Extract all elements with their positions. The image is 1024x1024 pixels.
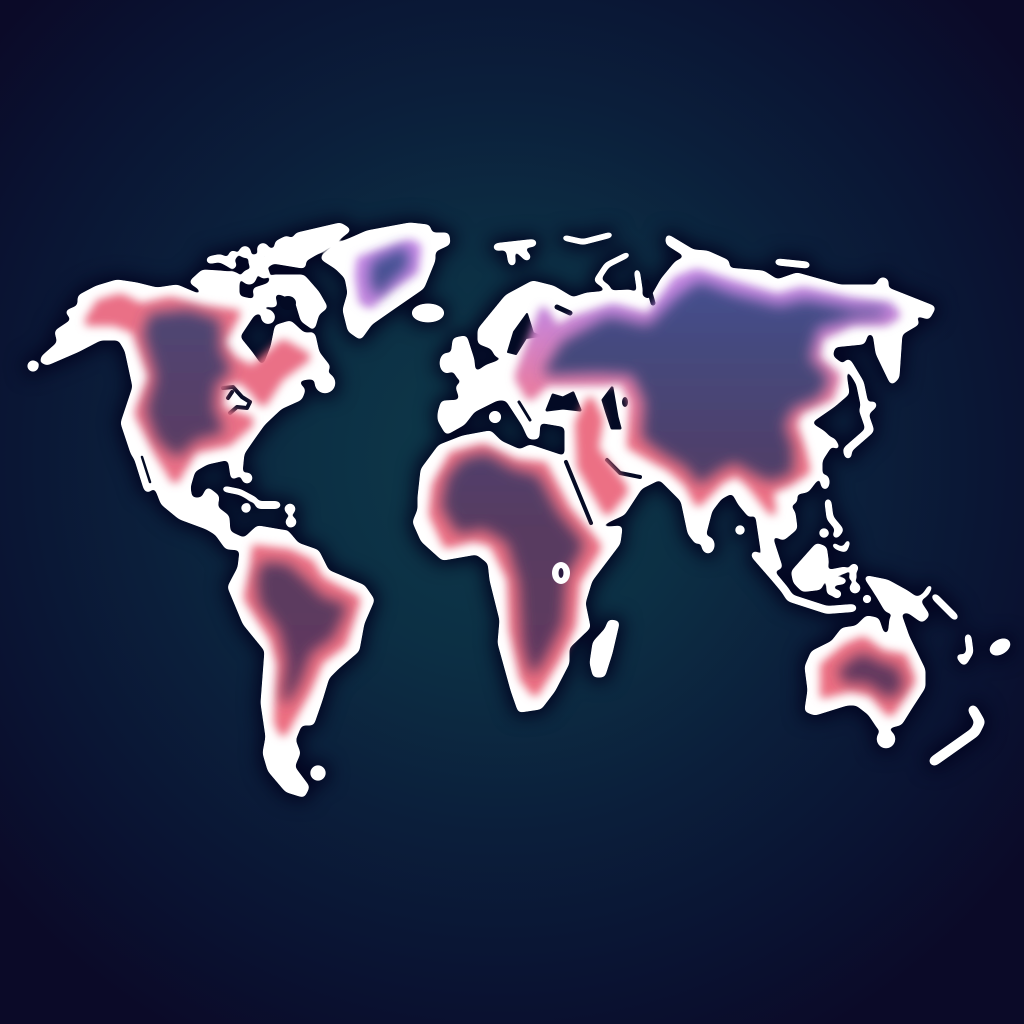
- core: North America: [147, 313, 227, 453]
- island: New Guinea: [867, 578, 930, 620]
- continent: Africa: [415, 433, 620, 710]
- island: Falklands: [312, 768, 324, 778]
- rim: North America: [88, 297, 307, 480]
- island: Newfoundland: [317, 375, 333, 391]
- core: Eurasia: [548, 285, 885, 480]
- water: Persian Gulf: [607, 460, 640, 477]
- peninsula: Baja California: [137, 453, 148, 488]
- island: Aleutian dot: [28, 361, 38, 371]
- water: Gulf of California: [142, 457, 150, 482]
- core: Greenland: [373, 250, 406, 292]
- rim: Africa: [432, 447, 598, 693]
- islands: Arctic Eurasia: [497, 235, 886, 292]
- water: Caspian Sea: [603, 388, 620, 428]
- continent: Australia: [807, 617, 923, 728]
- islands: Caribbean: [225, 473, 296, 527]
- island: Greenland: [323, 225, 448, 337]
- rim: Australia: [823, 640, 912, 713]
- core: Australia: [842, 657, 900, 695]
- core: Africa: [445, 457, 580, 670]
- water: Adriatic: [519, 402, 530, 420]
- dark core fill of the landmasses: [147, 250, 900, 700]
- water: White Sea and Ob: [557, 282, 653, 313]
- continent: South America: [230, 528, 372, 795]
- islands: Japan and Sakhalin: [847, 363, 873, 455]
- rim: South America: [247, 548, 357, 733]
- rim glow: pink and lavender inner edge: [88, 243, 912, 733]
- ring: Lake Victoria centre: [558, 568, 564, 578]
- islands: New Zealand: [934, 710, 980, 761]
- islands: Canadian Arctic: [192, 225, 348, 327]
- white landmass silhouettes with dark glow: [28, 225, 1010, 795]
- rim: Greenland: [358, 243, 418, 305]
- lake ring in East Africa: [552, 562, 570, 584]
- water: Black Sea: [547, 393, 580, 410]
- water: Red Sea: [566, 462, 591, 523]
- islands: Britain and Ireland: [442, 338, 473, 378]
- continent: Eurasia: [440, 237, 933, 568]
- island: Madagascar: [592, 622, 617, 675]
- island: Sardinia: [491, 413, 499, 421]
- water: Baltic Sea: [508, 314, 540, 354]
- islands: Southeast Asia: [702, 475, 871, 610]
- core: South America: [260, 565, 343, 700]
- island: Tasmania: [879, 732, 893, 746]
- rim: Eurasia: [518, 272, 897, 512]
- water: Great Lakes: [223, 387, 250, 413]
- rim: Arabia and Anatolia: [578, 400, 625, 512]
- water: Arctic channel: [280, 296, 296, 310]
- ring: Lake Victoria outer: [552, 562, 570, 584]
- island: Iceland: [414, 306, 442, 320]
- continent: North America: [43, 282, 328, 548]
- inland seas and coastline gaps: [142, 282, 653, 523]
- islands: Pacific: [935, 597, 1010, 662]
- water: Aral Sea: [622, 397, 628, 407]
